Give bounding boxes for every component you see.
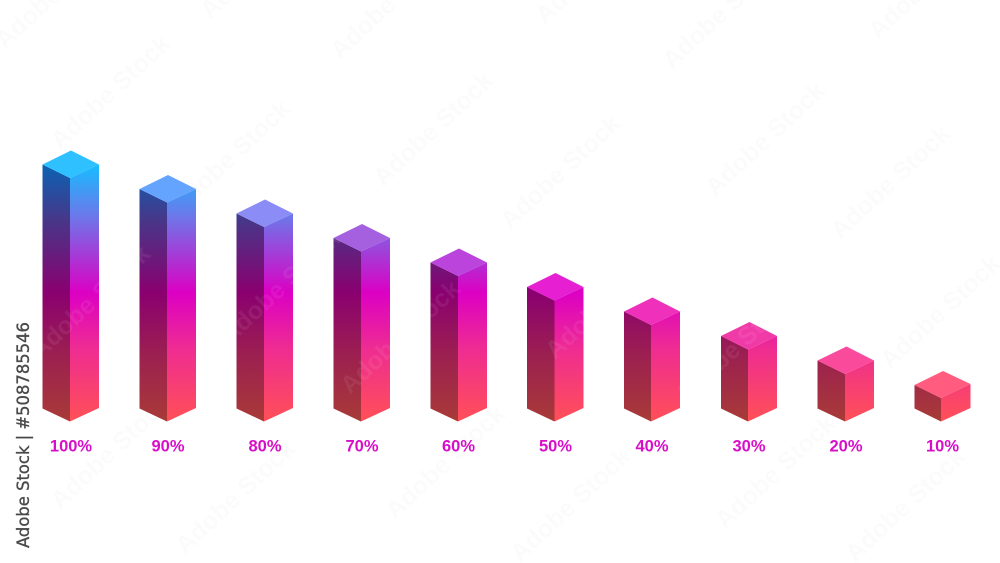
bar: 80%	[236, 200, 293, 422]
percentage labels: 10%	[926, 438, 959, 456]
percentage labels: 20%	[829, 438, 863, 456]
bar: 10%	[914, 371, 970, 422]
percentage labels: 30%	[732, 438, 766, 456]
watermark: repeated Adobe Stock text: Adobe Stock	[495, 110, 626, 234]
watermark: Adobe Stock text over the bars: Adobe Stock	[25, 240, 156, 364]
watermark: repeated Adobe Stock text: Adobe Stock	[825, 120, 956, 244]
watermark: Adobe Stock text over the bars: Adobe Stock	[335, 275, 466, 399]
percentage labels	[50, 438, 959, 456]
percentage labels: 40%	[635, 438, 669, 456]
bar: 60%	[430, 248, 487, 422]
watermark: repeated Adobe Stock text: Adobe Stock	[165, 95, 296, 219]
watermark: repeated Adobe Stock text: Adobe Stock	[710, 410, 841, 534]
watermark: Adobe Stock text over the bars	[25, 225, 801, 409]
bar: 20%	[818, 346, 874, 422]
watermark: repeated Adobe Stock text: Adobe Stock	[368, 67, 499, 191]
bar: 90%	[140, 175, 196, 422]
watermark: Adobe Stock text over the bars: Adobe Stock	[540, 240, 671, 364]
bar: 30%	[721, 322, 777, 422]
percentage labels: 70%	[345, 438, 379, 456]
watermark: repeated Adobe Stock text: Adobe Stock	[380, 400, 511, 524]
watermark: repeated Adobe Stock text: Adobe Stock	[700, 77, 831, 201]
bar: 50%	[527, 273, 584, 422]
bar: 100%	[42, 150, 99, 422]
watermark: repeated Adobe Stock text: Adobe Stock	[45, 390, 176, 514]
percentage labels: 90%	[151, 438, 185, 456]
bar: 40%	[624, 298, 680, 422]
percentage labels: 60%	[442, 438, 475, 456]
stock credit: vertical text: Adobe Stock | #508785546	[14, 322, 34, 548]
percentage labels: 80%	[248, 438, 282, 456]
watermark: repeated Adobe Stock text: Adobe Stock	[45, 30, 176, 154]
watermark: Adobe Stock text over the bars: Adobe Stock	[215, 225, 346, 349]
watermark: repeated Adobe Stock text: Adobe Stock	[170, 435, 301, 559]
percentage labels: 100%	[50, 438, 92, 456]
percentage labels: 50%	[539, 438, 572, 456]
watermark: Adobe Stock text over the bars: Adobe Stock	[670, 285, 801, 409]
bar: 70%	[334, 224, 390, 422]
